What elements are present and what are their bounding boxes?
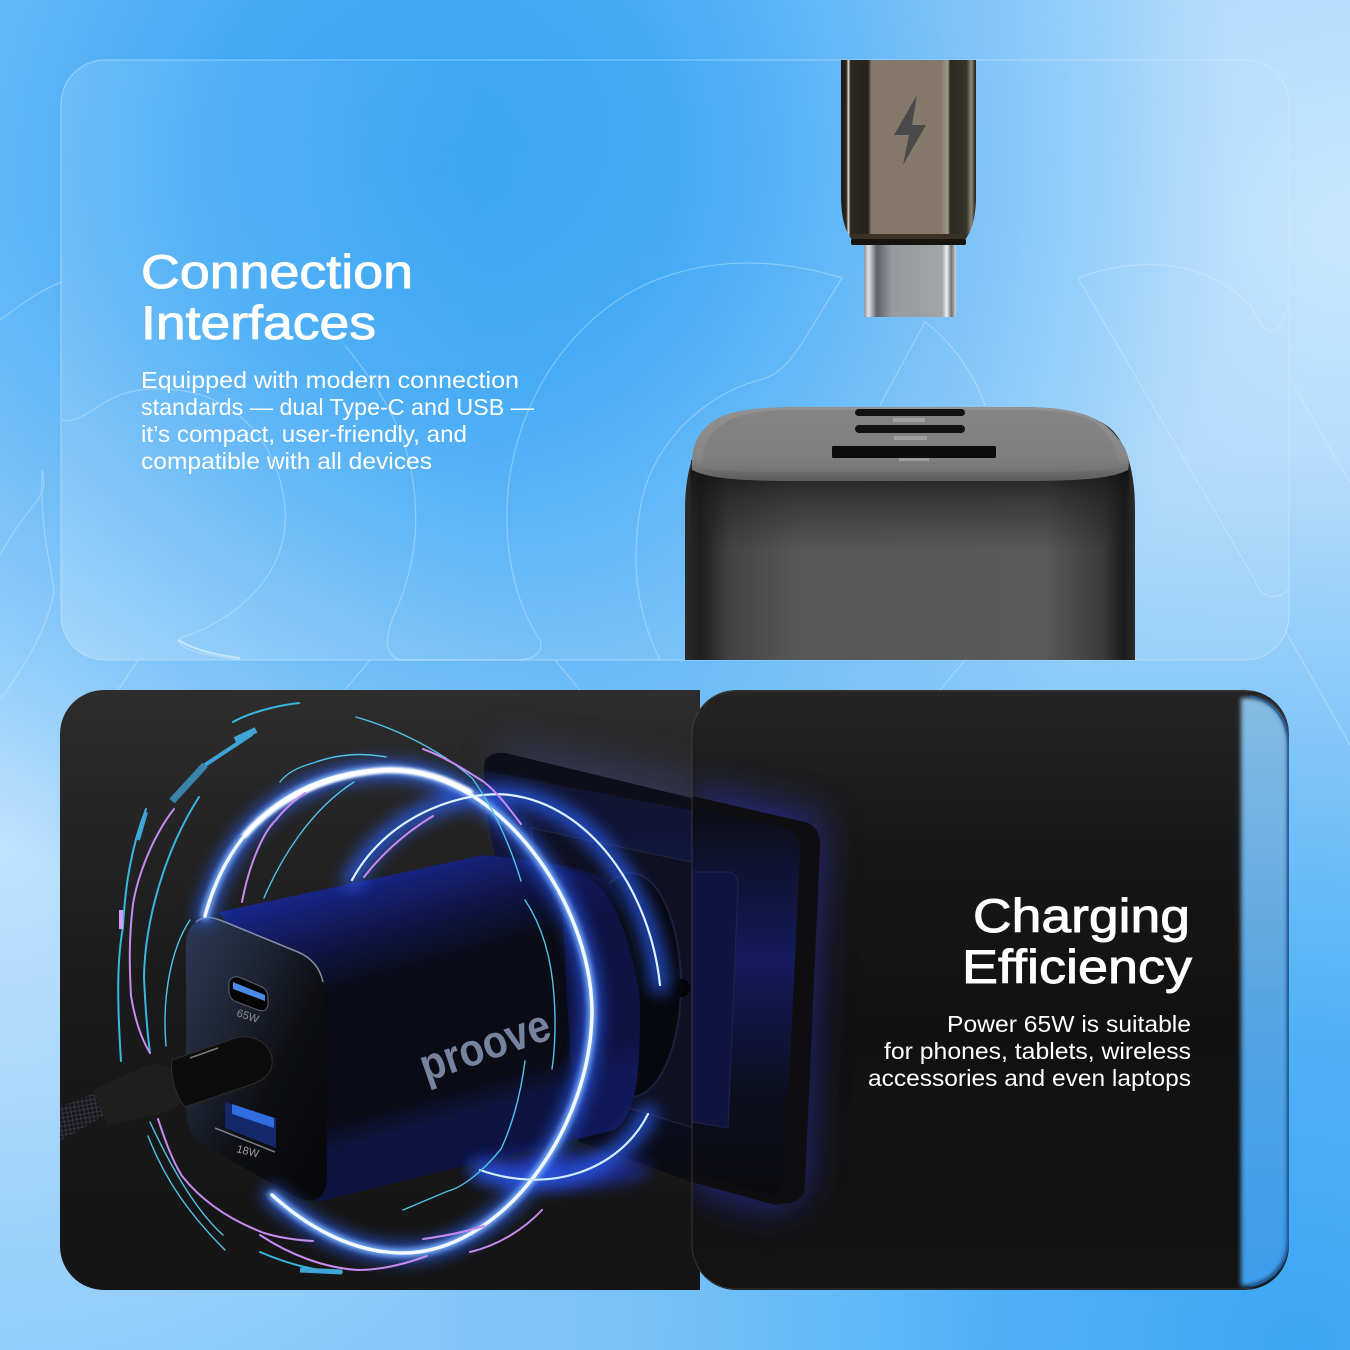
heading: charging efficiency xyxy=(962,889,1193,993)
wall plate inset xyxy=(531,828,700,1130)
heading: connection interfaces: Connection xyxy=(141,245,413,298)
text block: connection description xyxy=(141,367,534,474)
port power labels xyxy=(893,418,929,461)
heading: charging efficiency: Charging xyxy=(973,889,1190,942)
panel glass surface xyxy=(61,60,1289,660)
text block: connection description: standards — dual Type-C and USB — xyxy=(141,394,534,420)
image: charger top view with ports xyxy=(685,407,1135,660)
secondary ring xyxy=(352,794,660,985)
cable connector xyxy=(172,1037,272,1107)
frosted blue strip xyxy=(1241,698,1288,1286)
text block: connection description: Equipped with modern connection xyxy=(141,367,519,393)
plug housing xyxy=(841,60,976,245)
text block: charging description: accessories and even laptops xyxy=(868,1065,1191,1091)
usb-a port highlight xyxy=(232,1104,274,1128)
heading: connection interfaces: Interfaces xyxy=(141,296,376,349)
image: usb-c cable plug xyxy=(841,60,976,317)
plate blur glow xyxy=(692,790,820,1210)
charger body shading xyxy=(691,460,1129,537)
plug base line xyxy=(851,239,966,245)
brand logo: proove xyxy=(412,998,557,1091)
text block: charging description: for phones, tablets, wireless xyxy=(884,1038,1191,1064)
charger body xyxy=(219,855,640,1202)
usb-c metal tip xyxy=(864,240,956,317)
top face inset xyxy=(707,410,1112,444)
usb-a port rim xyxy=(215,1128,275,1152)
socket hole xyxy=(680,979,690,997)
inner thin cyan rings xyxy=(148,717,555,1250)
heading: charging efficiency: Efficiency xyxy=(962,940,1193,993)
charger front face xyxy=(186,919,327,1201)
outer cyan arcs xyxy=(118,703,342,1272)
usb-c port one xyxy=(855,409,965,416)
thick cyan dashes xyxy=(138,730,342,1272)
usb-c port light xyxy=(233,982,265,1001)
panel: connection interfaces xyxy=(0,60,1350,745)
wall plate xyxy=(484,753,700,1185)
plate front inset xyxy=(692,806,800,1195)
magenta thick dash xyxy=(119,910,123,929)
panel rim line xyxy=(692,691,1350,1289)
connector bolt mark xyxy=(190,1048,218,1058)
label 18W: 18W xyxy=(235,1143,261,1161)
charger body xyxy=(685,407,1135,660)
panel: charging efficiency xyxy=(60,690,1350,1290)
main ring core xyxy=(205,770,592,1253)
wall plate top edge xyxy=(484,753,700,812)
glowing energy rings xyxy=(118,703,660,1272)
heading: connection interfaces xyxy=(141,245,413,349)
socket ring xyxy=(609,872,682,1098)
icon: lightning bolt xyxy=(894,95,926,165)
plug plate glow xyxy=(494,733,692,798)
face top rim highlight xyxy=(196,917,323,982)
body right blue tint xyxy=(560,870,640,1140)
main bright ring xyxy=(205,770,592,1253)
text block: connection description: compatible with all devices xyxy=(141,448,432,474)
magenta arcs xyxy=(130,749,542,1270)
charger top face xyxy=(692,407,1129,481)
panel lower glaze xyxy=(61,60,1289,660)
text block: charging description xyxy=(868,1011,1191,1091)
plate large view xyxy=(692,796,820,1205)
background outline shapes xyxy=(0,263,1350,745)
braided cable xyxy=(60,1092,106,1141)
charger photo illustration xyxy=(60,740,700,1202)
plate socket inset xyxy=(692,872,738,1128)
dark image background xyxy=(60,690,700,1290)
usb-a port xyxy=(832,446,996,458)
text block: connection description: it’s compact, user-friendly, and xyxy=(141,421,467,447)
right panel blue rim xyxy=(1250,696,1288,1286)
main ring thick top highlight xyxy=(245,770,470,835)
plug collar xyxy=(849,234,968,241)
panel soft fill xyxy=(692,690,1289,1290)
blue floor glow xyxy=(470,1152,650,1188)
label 65W: 65W xyxy=(235,1007,261,1026)
usb-c port xyxy=(229,977,268,1011)
usb-c port two xyxy=(855,425,965,433)
usb-a port xyxy=(225,1102,276,1148)
lower secondary ring xyxy=(480,1114,648,1180)
cable strain relief xyxy=(94,1092,106,1116)
right dark glass panel xyxy=(692,690,1350,1290)
text block: charging description: Power 65W is suitable xyxy=(947,1011,1191,1037)
ring glow xyxy=(205,770,660,1253)
